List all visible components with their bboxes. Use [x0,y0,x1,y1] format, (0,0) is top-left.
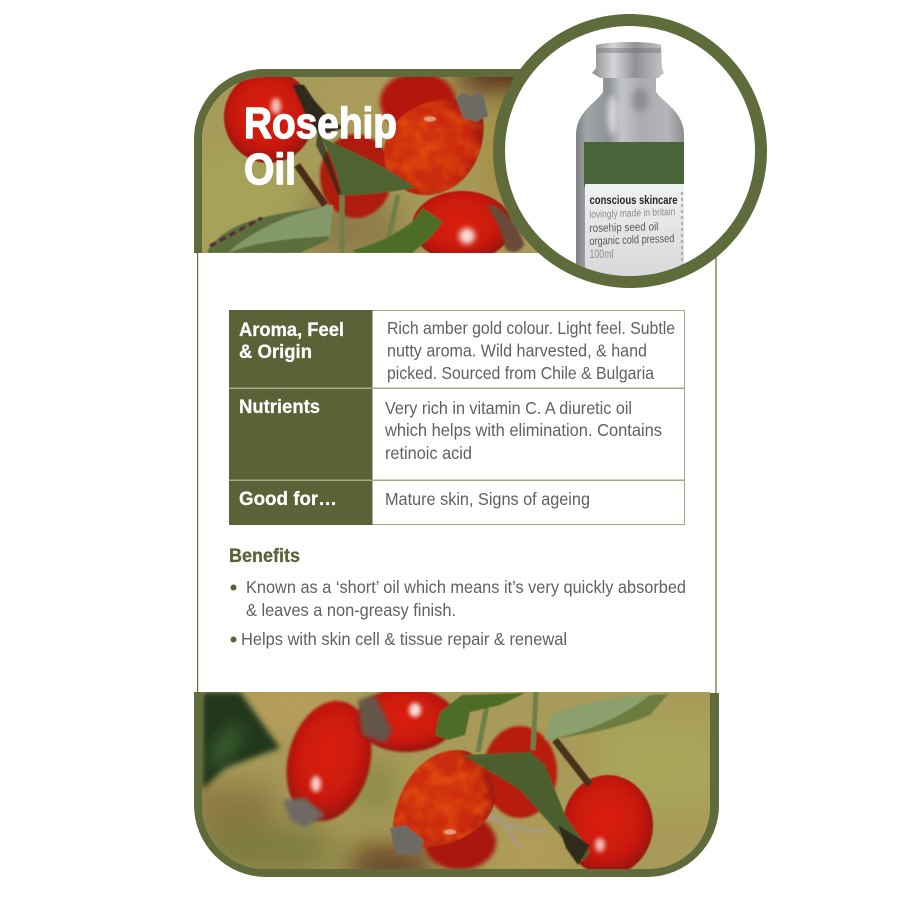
row body: Mature skin, Signs of ageing [385,489,590,509]
row: good for [239,488,590,510]
circle background [499,20,761,282]
berry: lower right [412,191,512,261]
berry cap [456,92,488,122]
row body: picked. Sourced from Chile & Bulgaria [387,363,654,383]
berry cap [390,825,424,855]
leaf upper right [545,694,668,740]
berry: main orange hip [384,99,484,195]
row body: which helps with elimination. Contains [384,420,662,440]
title line 1: Rosehip [244,99,397,148]
row body: Rich amber gold colour. Light feel. Subtle [387,318,675,338]
benefits section [229,546,686,649]
berry: main orange hip [393,750,495,847]
leaf bottom right [353,208,443,253]
label tagline: lovingly made in britain [589,206,676,221]
row heading: Aroma, Feel [239,319,344,341]
stems [342,192,398,253]
row body: nutty aroma. Wild harvested, & hand [387,340,647,360]
row body: retinoic acid [385,443,472,463]
green label band [584,142,684,187]
leaf upper middle [435,693,525,740]
card outline: thin side rules [197,253,717,693]
banner border [194,692,719,877]
bottle body [576,72,684,280]
berry: left [284,699,374,823]
title line 2: Oil [244,145,296,194]
berry: lower middle behind [424,814,496,870]
berry: right [563,775,653,875]
photo: rosehips bottom [202,692,710,869]
stem right [555,740,590,785]
photo: rosehips top [202,77,538,253]
row heading: Good for… [239,488,337,510]
title [244,99,397,194]
berry: upper left [224,71,314,163]
panel: top rosehip photo banner [194,69,538,253]
bottle cap [592,42,664,78]
row heading: Nutrients [239,396,320,418]
row: aroma, feel and origin [239,318,675,383]
white label [585,184,684,284]
row dividers [229,388,685,481]
twig [490,815,545,848]
benefit 1: Known as a ‘short’ oil which means it’s very quickly absorbed [246,577,686,597]
label volume: 100ml [590,249,614,261]
table frame [230,310,684,524]
benefit 2: Helps with skin cell & tissue repair & renewal [241,629,567,649]
label process: organic cold pressed [589,233,675,248]
label product: rosehip seed oil [589,221,659,235]
panel: bottom rosehip photo banner [194,692,719,877]
berry: centre behind leaf [320,134,392,218]
benefits heading: Benefits [229,546,300,567]
berry: behind leaf [483,726,557,818]
icon: aluminium bottle [576,42,684,284]
table: oil properties [229,310,685,525]
row: nutrients [239,396,662,463]
benefit 1 [230,577,686,620]
berry: top [356,688,456,752]
berry: top middle [376,77,458,126]
row heading: & Origin [239,341,312,363]
label brand: conscious skincare [590,195,678,207]
row body: Very rich in vitamin C. A diuretic oil [385,398,632,418]
blurred dark foliage [202,692,280,790]
header column [229,310,372,525]
product circle with bottle [499,20,761,284]
stem [297,165,325,205]
stems [478,692,536,752]
dark leaf [322,138,415,195]
dark leaf [463,752,590,862]
banner border [194,69,560,253]
benefit 1: & leaves a non-greasy finish. [246,600,456,620]
leaf bottom left [208,205,333,253]
